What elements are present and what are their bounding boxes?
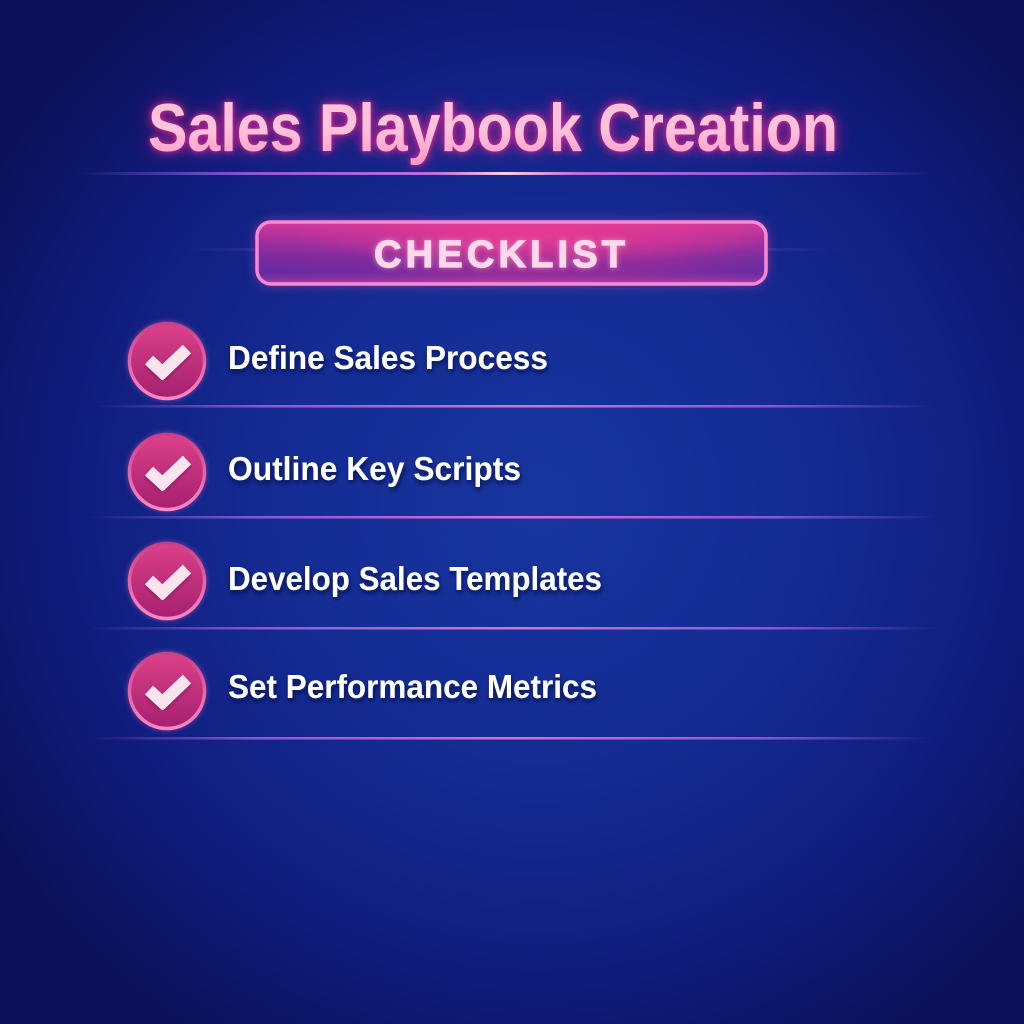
title: Sales Playbook Creation <box>148 90 838 166</box>
icon: check badge <box>128 322 206 400</box>
checklist banner: CHECKLIST <box>374 234 625 276</box>
item label: Outline Key Scripts <box>228 450 521 487</box>
icon: check badge <box>128 542 206 620</box>
divider <box>95 405 935 408</box>
item label: Define Sales Process <box>228 339 548 376</box>
checklist item 3 <box>128 542 602 620</box>
icon: check badge <box>128 652 206 730</box>
checklist item 2 <box>128 433 521 511</box>
checklist banner <box>180 221 840 285</box>
divider <box>90 737 930 740</box>
item label: Develop Sales Templates <box>228 560 602 597</box>
checklist item 4 <box>128 652 597 730</box>
divider <box>90 516 940 518</box>
banner label: CHECKLIST <box>374 234 625 276</box>
divider <box>90 627 940 630</box>
title divider <box>80 172 930 175</box>
icon: check badge <box>128 433 206 511</box>
title: Sales Playbook Creation <box>148 90 838 166</box>
title: Sales Playbook Creation <box>148 90 838 166</box>
item label: Set Performance Metrics <box>228 668 597 705</box>
checklist item 1 <box>128 322 548 400</box>
